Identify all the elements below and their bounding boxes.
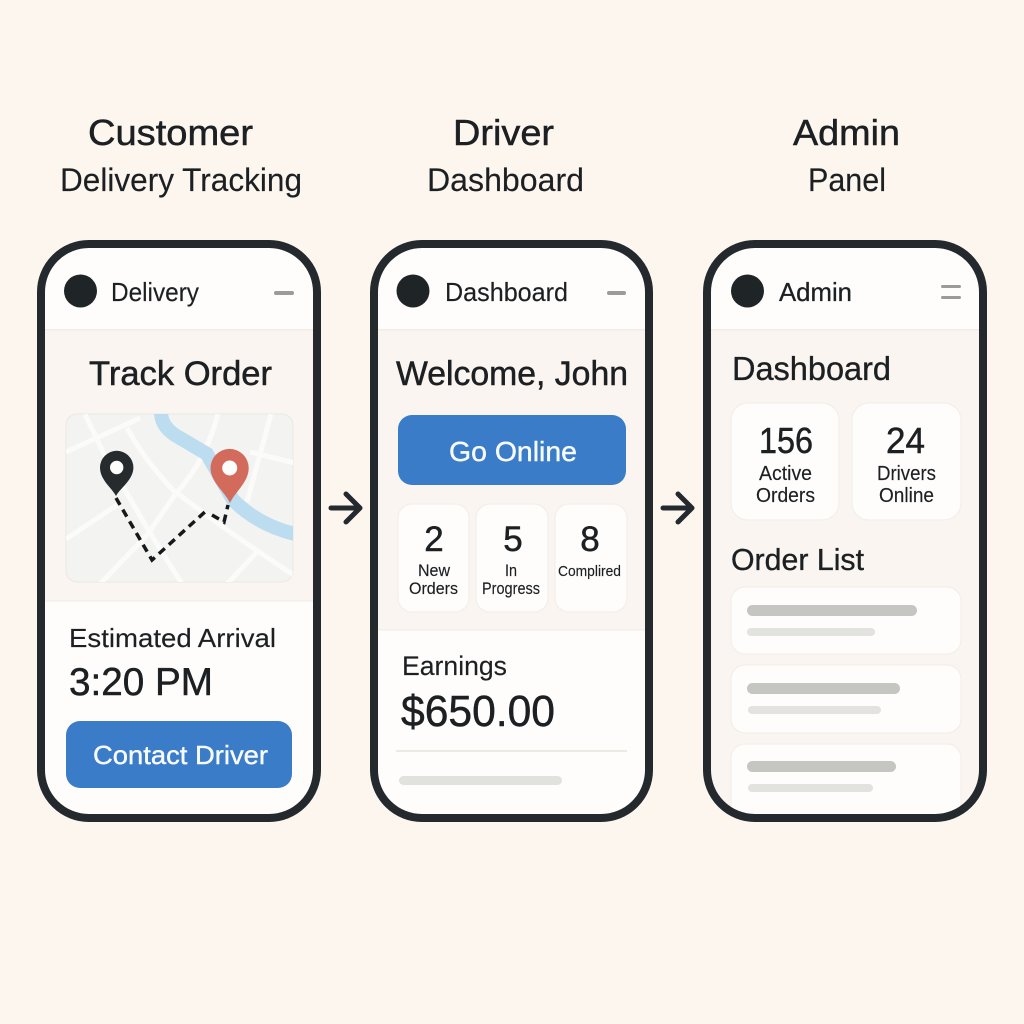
- header label: dashboard: Dashboard: [445, 277, 568, 307]
- text: arrival time: 3:20 PM: [69, 661, 213, 704]
- arrow: driver to admin: [663, 494, 692, 522]
- placeholder bar: [399, 776, 562, 785]
- title: order list: Order List: [731, 542, 864, 577]
- icon: origin pin: [100, 451, 133, 496]
- icon: minimize dash: [607, 291, 626, 295]
- panel: admin phone: [707, 244, 983, 834]
- card: in progress: [476, 504, 548, 612]
- stat card: drivers online: Online: [879, 485, 934, 507]
- card: new orders: Orders: [409, 579, 458, 598]
- heading: admin panel: [793, 112, 900, 198]
- stat card: active orders: Active: [759, 463, 812, 485]
- heading: driver dashboard: [427, 112, 584, 198]
- list card 1: [731, 587, 961, 654]
- text: estimated arrival: Estimated Arrival: [69, 623, 276, 653]
- heading: customer delivery tracking: [60, 112, 302, 198]
- title: welcome: Welcome, John: [396, 355, 628, 393]
- card: in progress: 5: [503, 520, 523, 559]
- stat card: active orders: Orders: [756, 485, 815, 507]
- button: contact driver: Contact Driver: [93, 740, 268, 770]
- stat card: drivers online: [852, 403, 961, 520]
- phone frame: [374, 244, 649, 818]
- stat card: active orders: [731, 403, 839, 520]
- phone frame: [41, 244, 317, 818]
- icon: destination pin: [210, 449, 249, 503]
- text: earnings amount: $650.00: [401, 687, 555, 736]
- icon: hamburger menu: [941, 285, 961, 299]
- icon: minimize dash: [274, 291, 294, 295]
- stat card: drivers online: 24: [886, 420, 925, 461]
- title: track order: Track Order: [89, 355, 272, 393]
- map: [66, 412, 295, 584]
- header label: delivery: Delivery: [111, 277, 199, 307]
- panel: customer phone: [41, 244, 317, 818]
- card: new orders: [398, 504, 469, 612]
- card: in progress: Progress: [482, 579, 540, 598]
- route: dashed path: [116, 498, 228, 560]
- icon: delivery avatar: [64, 274, 97, 308]
- card: completed: 8: [580, 520, 600, 559]
- stat card: active orders: 156: [759, 420, 813, 461]
- card: new orders: 2: [424, 520, 444, 559]
- heading: driver dashboard: Driver: [453, 112, 554, 153]
- stat card: drivers online: Drivers: [877, 463, 936, 485]
- heading: driver dashboard: Dashboard: [427, 162, 584, 198]
- card: new orders: New: [418, 561, 451, 580]
- heading: admin panel: Admin: [793, 112, 900, 153]
- heading: customer delivery tracking: Customer: [88, 112, 253, 153]
- panel: driver phone: [374, 244, 649, 818]
- list card 2: [731, 665, 961, 733]
- text: earnings label: Earnings: [402, 651, 507, 681]
- phone frame: [707, 244, 983, 818]
- button: go online: Go Online: [449, 436, 577, 467]
- button: go online: [398, 415, 626, 485]
- button: contact driver: [66, 721, 292, 788]
- title: dashboard: Dashboard: [732, 350, 891, 387]
- icon: admin avatar: [731, 274, 764, 308]
- heading: admin panel: Panel: [808, 162, 886, 198]
- header label: admin: Admin: [779, 277, 852, 307]
- card: completed: Complired: [558, 563, 621, 580]
- list card 3: [730, 744, 962, 814]
- icon: driver avatar: [396, 274, 430, 308]
- card: in progress: In: [505, 561, 517, 580]
- card: completed: [555, 504, 627, 612]
- heading: customer delivery tracking: Delivery Tracking: [60, 162, 302, 198]
- arrow: customer to driver: [331, 494, 360, 522]
